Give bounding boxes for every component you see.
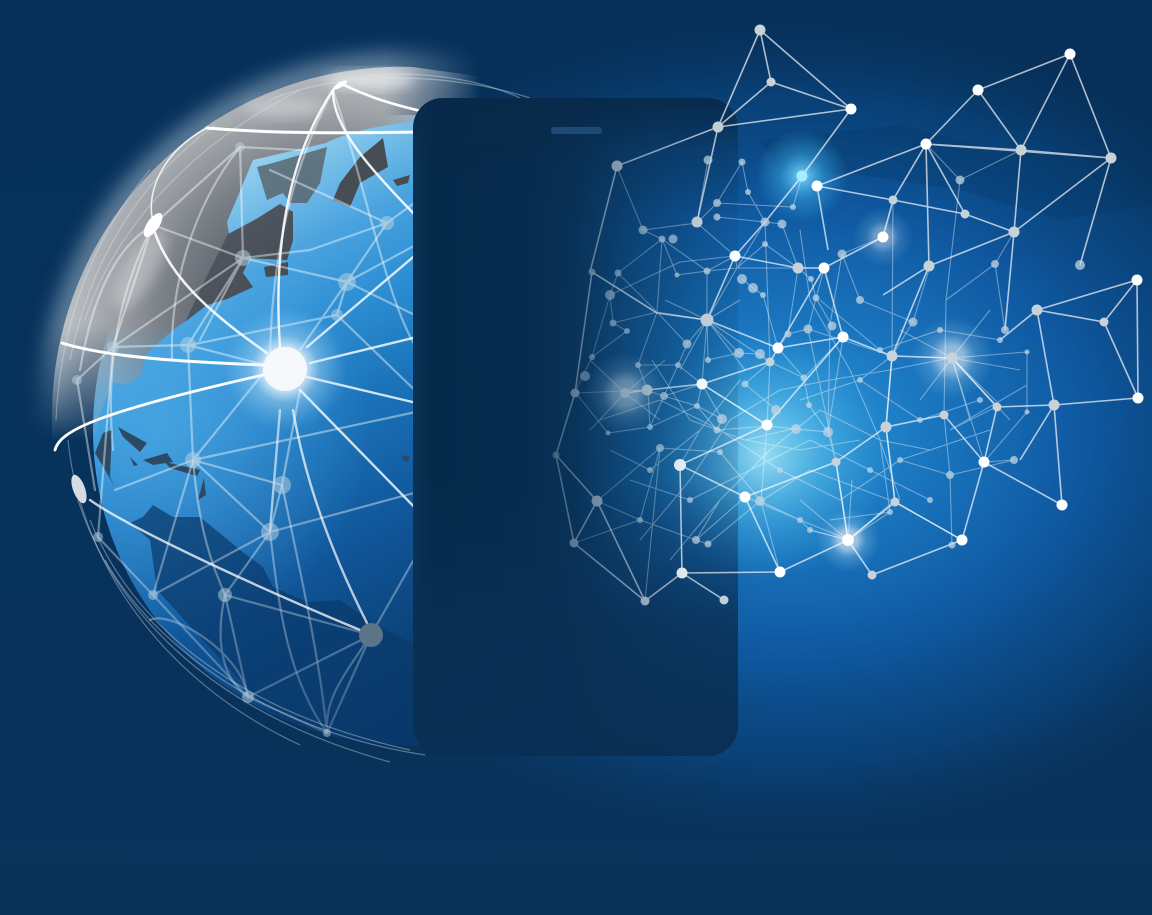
network: fine inner mesh: [574, 144, 1027, 601]
continent: south america: [130, 505, 413, 716]
phone body: [413, 98, 738, 756]
globe mesh lines: [77, 90, 425, 733]
network glow: [640, 130, 913, 580]
network: bright white nodes: [674, 48, 1144, 578]
network: flares: [583, 316, 994, 572]
network: [552, 24, 1144, 606]
globe hub flare: [229, 313, 342, 426]
globe white oval markers: [68, 79, 348, 505]
network: medium grey nodes: [570, 24, 1116, 606]
network: main edges: [556, 30, 1138, 601]
polar grey cap: [52, 67, 490, 445]
phone speaker: [551, 127, 602, 134]
globe outer wire arcs: [56, 74, 530, 762]
globe nodes: [72, 142, 394, 737]
globe ocean sphere: [93, 115, 416, 726]
globe main wires: [55, 83, 425, 630]
globe top highlight: [104, 71, 415, 317]
globe halo glow: [53, 66, 490, 440]
network: cyan node: [796, 170, 808, 182]
continents: north america and islands: [95, 138, 410, 500]
network: small nodes: [552, 156, 1085, 548]
globe: [32, 40, 530, 762]
